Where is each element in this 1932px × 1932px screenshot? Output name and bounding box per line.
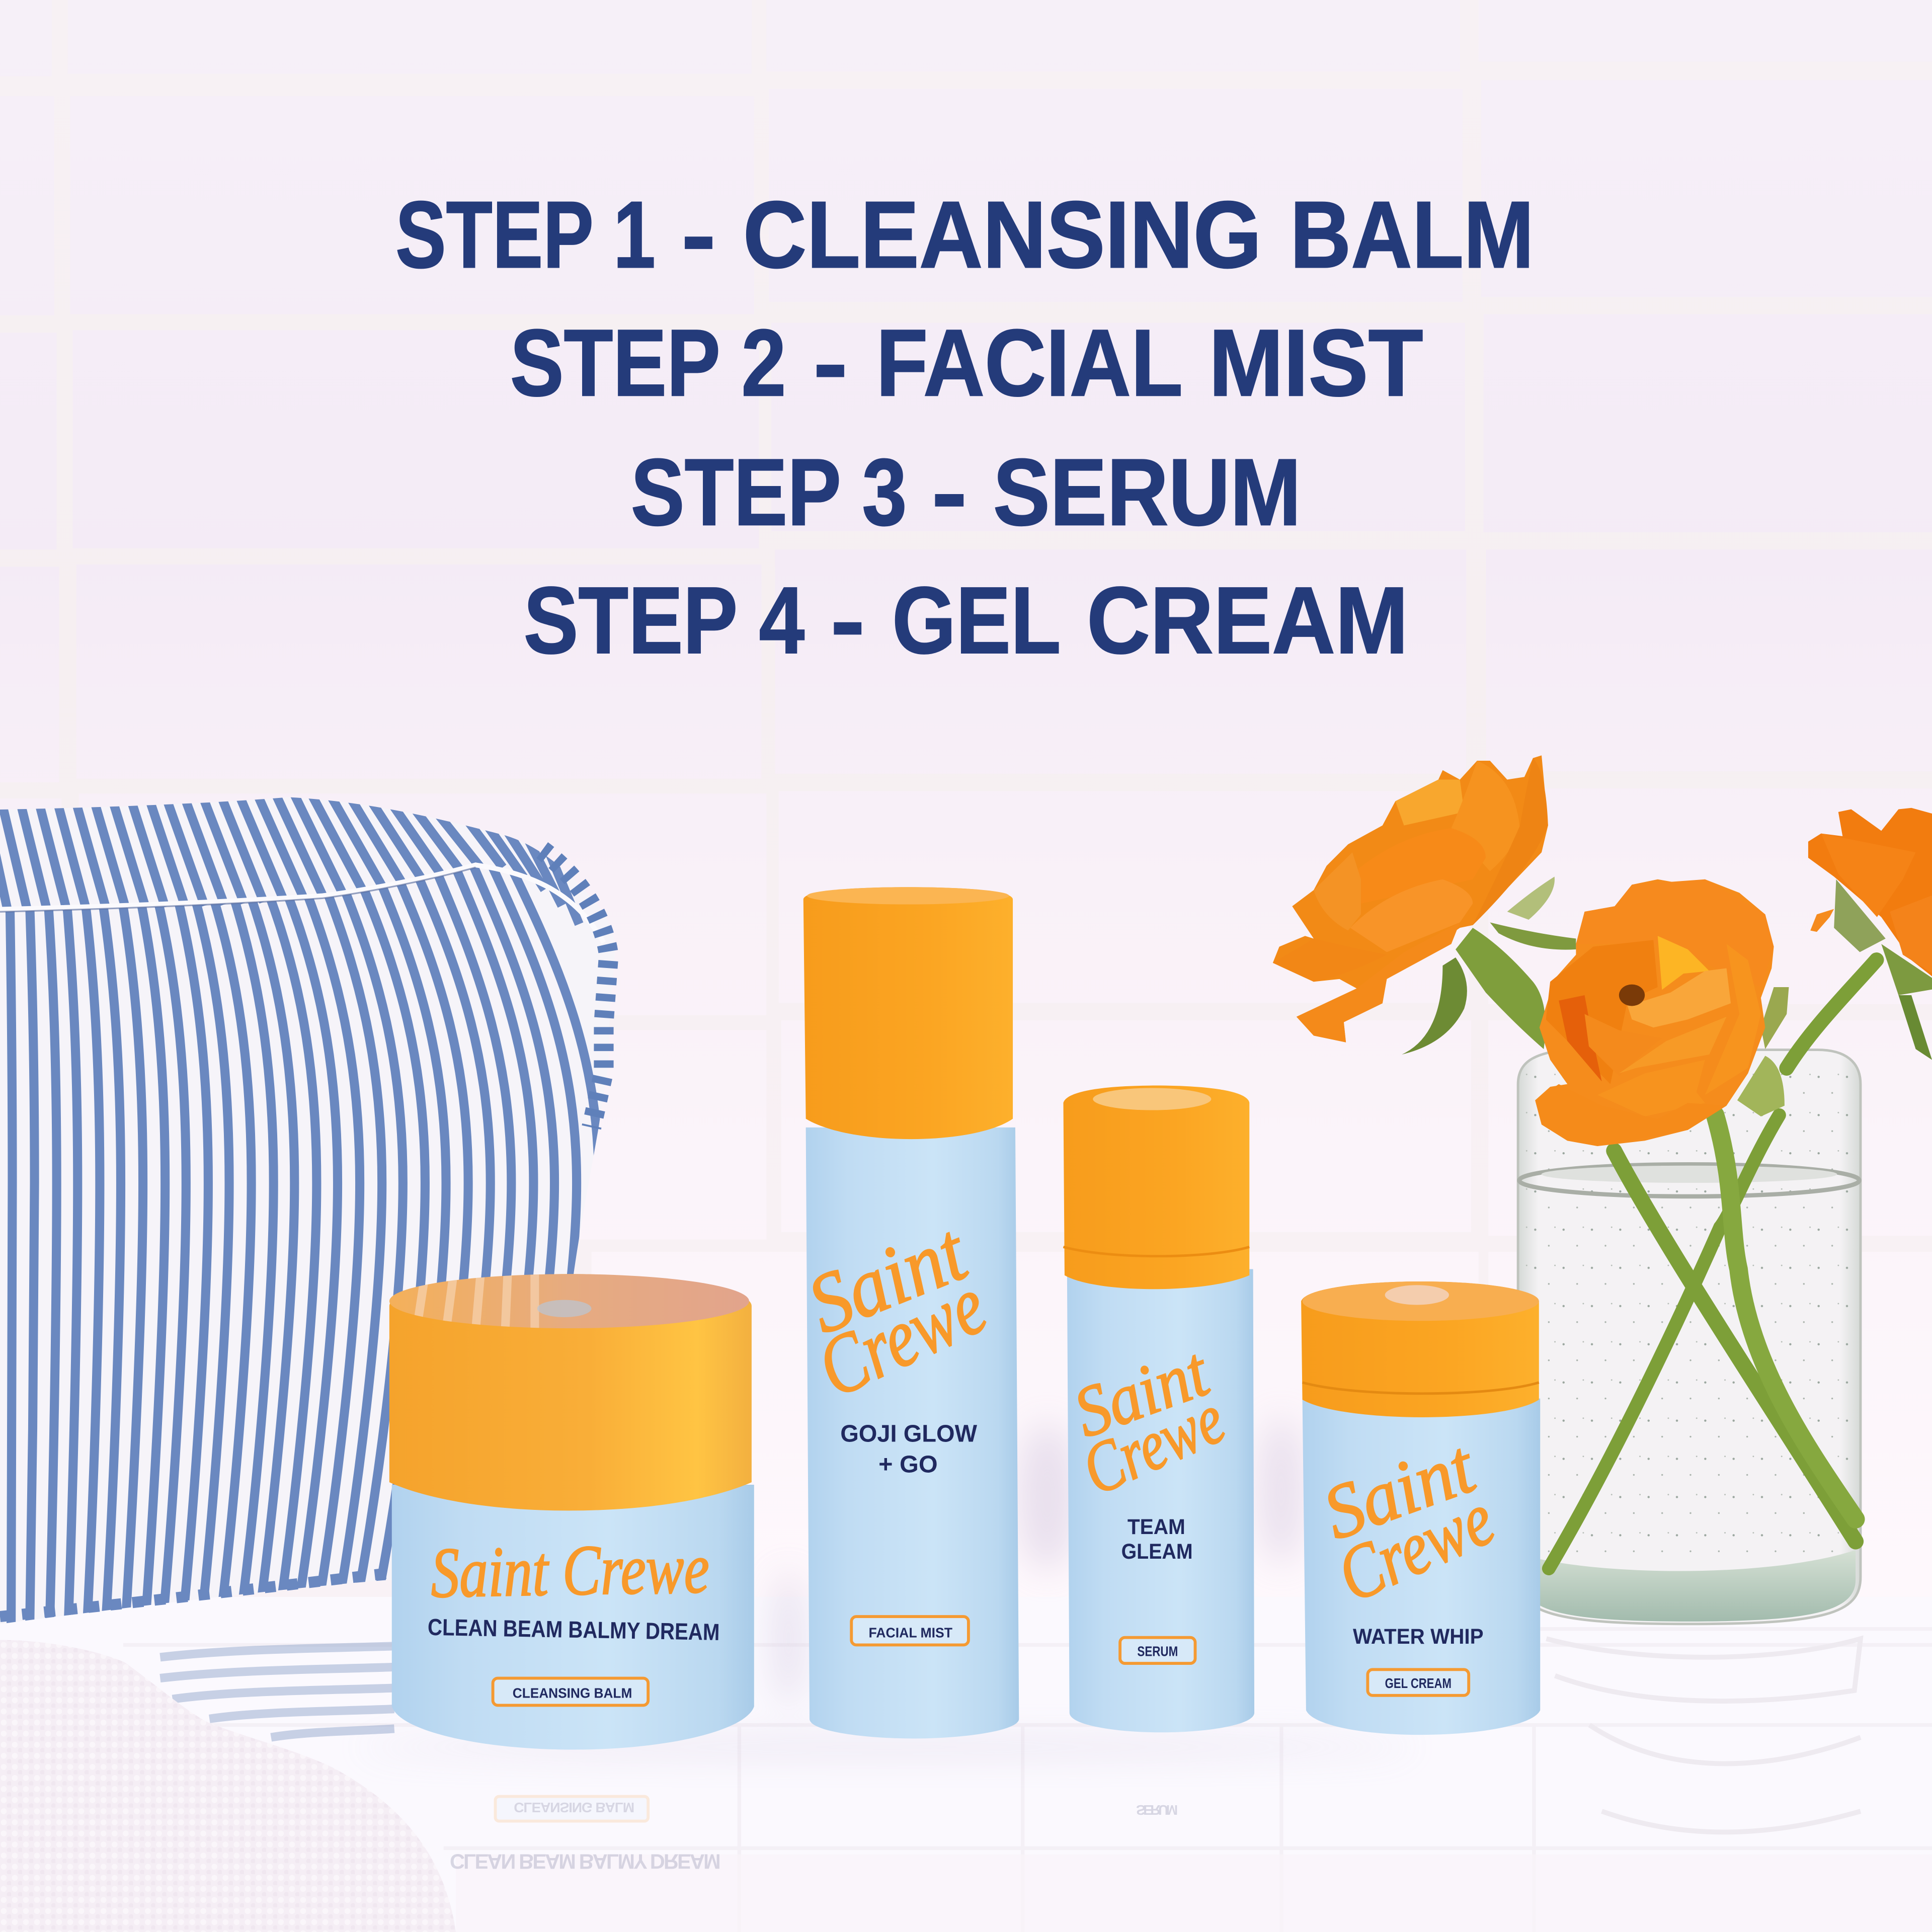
centre bloom leaves — [1737, 987, 1789, 1116]
serum body — [1067, 1269, 1254, 1732]
gel tag: GEL CREAM — [1385, 1675, 1452, 1691]
gel product name: WATER WHIP — [1353, 1625, 1484, 1649]
soft shadows on wall and counter — [357, 1417, 1417, 1754]
mirrored label reflections on counter — [450, 1797, 1178, 1874]
gel lid top — [1303, 1281, 1539, 1321]
left bloom petals — [1273, 758, 1548, 1042]
counter top — [0, 1597, 1932, 1932]
step 3 line: STEP 3 — [631, 439, 907, 545]
jar lid — [389, 1274, 752, 1510]
step 4 line: - — [831, 567, 865, 673]
jar logo: Saint Crewe — [430, 1528, 710, 1613]
mist logo — [795, 1205, 1000, 1415]
glass vase with stems — [1518, 960, 1877, 1624]
top band of bag with slanted stripes — [0, 797, 584, 926]
bag bottom piping — [0, 1572, 397, 1617]
mist cap — [803, 887, 1013, 1139]
serum cap — [1063, 1086, 1249, 1289]
product: serum bottle — [1063, 1086, 1254, 1732]
gel logo: Saint — [1313, 1423, 1487, 1556]
gel tag — [1367, 1669, 1469, 1696]
reflection of vase on counter — [1546, 1639, 1861, 1832]
flower: right cropped bloom — [1808, 808, 1932, 1060]
water inner tone — [1542, 1166, 1837, 1183]
step 3 line: - — [931, 439, 967, 545]
step 4 line: GEL — [892, 567, 1061, 673]
step 2 line — [510, 309, 1423, 416]
product: gel cream bottle — [1301, 1281, 1540, 1735]
jar tag — [493, 1678, 648, 1705]
mist body — [806, 1128, 1019, 1739]
mirrored label reflections on counter: SERUM — [1136, 1802, 1178, 1818]
mist logo: Saint — [795, 1205, 980, 1352]
product: facial mist bottle — [795, 887, 1019, 1739]
gel logo: Crewe — [1325, 1476, 1506, 1618]
step 4 line: STEP 4 — [524, 567, 804, 673]
step 3 line — [631, 439, 1301, 545]
vase glass body — [1518, 1050, 1861, 1624]
mist product name — [840, 1420, 978, 1478]
right bloom petals — [1821, 834, 1932, 995]
jar base — [392, 1485, 754, 1750]
headline: four routine steps — [395, 181, 1534, 673]
gel logo — [1313, 1423, 1506, 1618]
striped reflection of bag on counter — [160, 1646, 394, 1737]
step 2 line: - — [813, 309, 848, 416]
serum product name: TEAM — [1128, 1515, 1185, 1539]
serum product name: GLEAM — [1121, 1540, 1193, 1564]
folded white towel — [0, 1640, 456, 1932]
serum product name — [1121, 1515, 1193, 1564]
striped pouch bag — [0, 788, 628, 1639]
mist tag — [851, 1617, 969, 1645]
serum tag: SERUM — [1137, 1643, 1178, 1659]
step 1 line: BALM — [1290, 181, 1534, 287]
serum cap top button — [1093, 1088, 1211, 1110]
gel lid — [1301, 1281, 1539, 1417]
step 2 line: FACIAL — [876, 309, 1183, 416]
mist product name: + GO — [878, 1452, 938, 1478]
vase thick base — [1523, 1550, 1856, 1622]
step 1 line: CLEANSING — [743, 181, 1262, 287]
jar lid top with reflected stripes — [389, 1274, 749, 1331]
flower: centre bloom — [1535, 879, 1789, 1146]
serum logo: Crewe — [1071, 1379, 1236, 1510]
step 2 line: MIST — [1209, 309, 1423, 416]
gel body — [1303, 1399, 1540, 1735]
mirrored label reflections on counter: CLEAN BEAM BALMY DREAM — [450, 1850, 721, 1874]
step 1 line: - — [681, 181, 716, 287]
mist cap top — [807, 887, 1009, 905]
step 3 line: SERUM — [993, 439, 1301, 545]
stems — [1549, 960, 1877, 1569]
mist logo: Crewe — [804, 1258, 1000, 1415]
gel lid motif — [1385, 1285, 1449, 1305]
right bloom calyx and leaves — [1810, 909, 1932, 1060]
gel collar line — [1303, 1383, 1539, 1394]
jar product name: CLEAN BEAM BALMY DREAM — [428, 1614, 720, 1645]
jar top motif — [537, 1300, 592, 1317]
serum collar line — [1063, 1247, 1249, 1256]
step 2 line: STEP 2 — [510, 309, 786, 416]
bag piping along edge — [542, 850, 609, 1128]
water line — [1519, 1164, 1860, 1196]
centre bloom petals — [1535, 879, 1774, 1146]
step 1 line: STEP 1 — [395, 181, 656, 287]
serum logo — [1064, 1331, 1236, 1510]
step 1 line — [395, 181, 1534, 287]
left bloom leaves and calyx — [1402, 876, 1576, 1055]
step 4 line: CREAM — [1087, 567, 1408, 673]
mirrored label reflections on counter: CLEANSING BALM — [514, 1800, 634, 1815]
serum tag — [1120, 1638, 1195, 1663]
jar tag: CLEANSING BALM — [513, 1685, 632, 1701]
product: cleansing balm jar — [389, 1274, 754, 1750]
glass speckles — [1523, 1060, 1856, 1553]
mist tag: FACIAL MIST — [869, 1625, 952, 1641]
serum logo: Saint — [1064, 1331, 1220, 1453]
step 4 line — [524, 567, 1408, 673]
mist product name: GOJI GLOW — [840, 1420, 978, 1447]
flower: large left bloom — [1273, 755, 1576, 1055]
